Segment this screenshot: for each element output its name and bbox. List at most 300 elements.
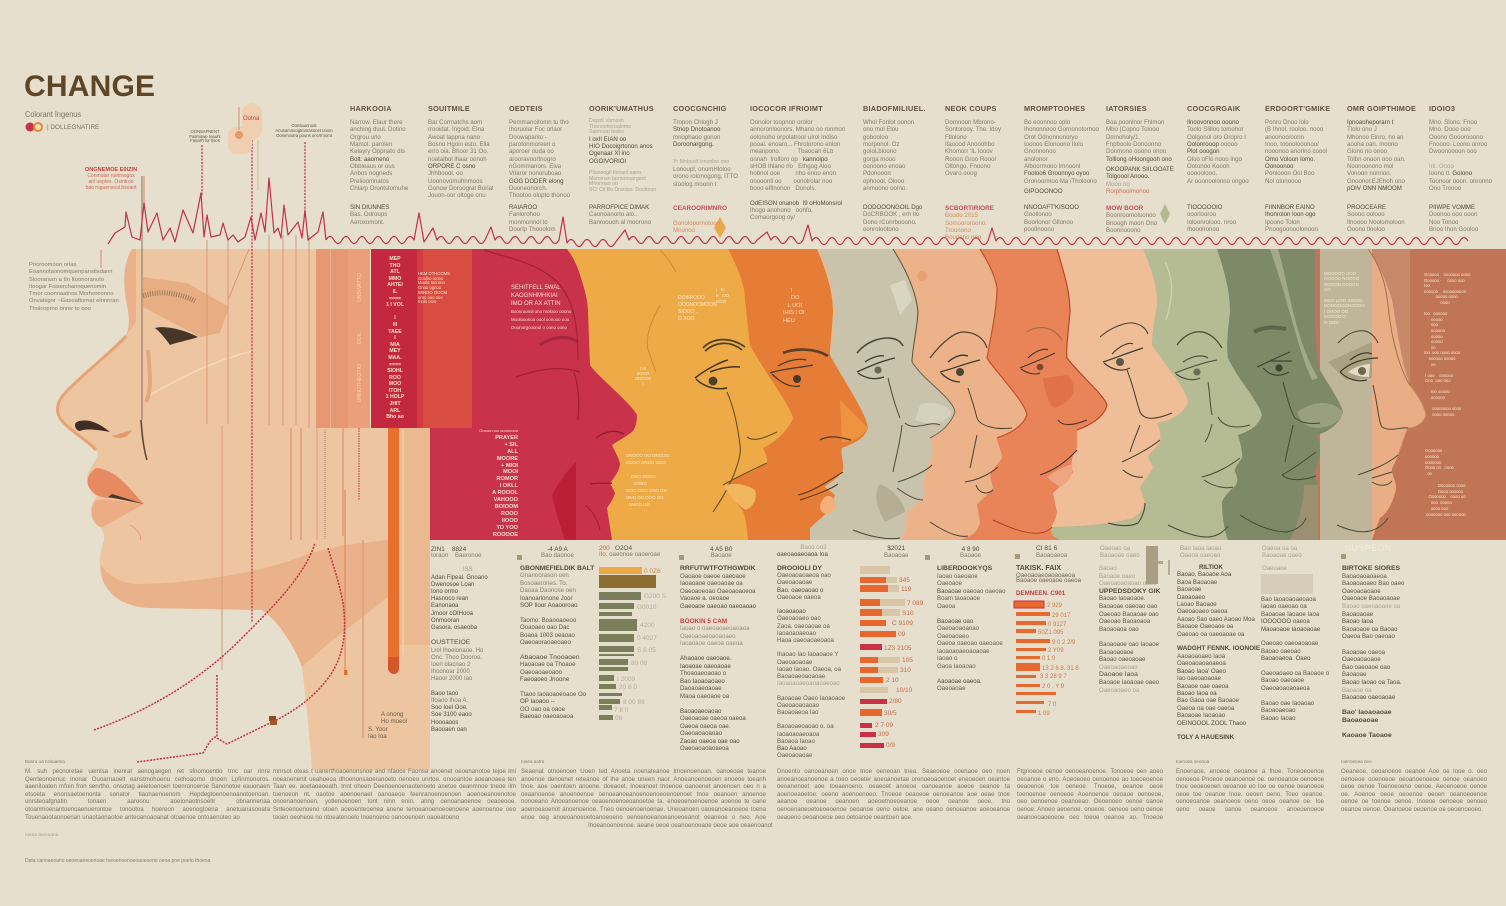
face text: lower crimson list: ROOO bbox=[501, 511, 518, 517]
column L: text: Kaoaoe Taoaoe bbox=[1342, 732, 1392, 739]
header column 4: Mamman tarmonoargent bbox=[589, 176, 646, 182]
header column 4: Sannoan tooko bbox=[589, 129, 624, 135]
header column 14: Inl. Oooo bbox=[1429, 163, 1454, 170]
header column 11: Toolo Slilloo tomohor bbox=[1187, 126, 1244, 133]
column G: text: Oaeoaoae bbox=[937, 685, 965, 692]
face text: crimson column: ITOH bbox=[389, 388, 401, 394]
header column 7: gorga mooo bbox=[863, 156, 896, 163]
header column 3: GOG DODER elong bbox=[509, 178, 564, 185]
small note near neck: A onong bbox=[381, 711, 403, 718]
face text: orange note: L UOI bbox=[788, 303, 802, 309]
header column 7: goIoLbloono bbox=[863, 148, 897, 155]
face 7: light olive profile bbox=[1040, 249, 1262, 540]
column L: square bbox=[1341, 554, 1346, 559]
stripes and red panels behind first face bbox=[316, 249, 472, 428]
column K: text: Maoaoaoe Iaoaoaoae bbox=[1261, 626, 1320, 633]
face text: orange note: OO bbox=[791, 295, 799, 301]
face text: crimson column: I bbox=[394, 315, 396, 321]
annotation: left note: Faoatl't for tloos bbox=[190, 138, 220, 143]
column D: header label bbox=[710, 546, 732, 559]
face text: red panel note: Goolno roono bbox=[418, 276, 443, 281]
text block: left paragraph: Prioroomoon orlas bbox=[29, 262, 76, 268]
face text: yellow lower notes: OOO OOO ONO OO bbox=[626, 488, 667, 493]
bar chart: stacked orange bars: 10/10 bbox=[896, 687, 913, 694]
header column 13: Gnoonol.EJEhoh ono bbox=[1347, 178, 1405, 185]
header column 8: Rooon Groo Roool bbox=[945, 156, 996, 163]
face text: crimson column: MAA. bbox=[388, 355, 402, 361]
annotation: right note: Oonsaunnoat bbox=[291, 123, 317, 128]
column I: text: Daoaoe Iaoa bbox=[1099, 671, 1138, 678]
text: Pnoogoonoolonoon bbox=[1265, 226, 1318, 233]
column A: text: Haoor 2000 Iao bbox=[431, 676, 472, 682]
header column 2: Awoat lappna nano bbox=[428, 134, 480, 141]
face text: crimson column: AHTEI bbox=[387, 282, 403, 288]
face text: yellow top right note: OOO bbox=[716, 299, 726, 304]
annotation: right note: Oommoutra pouns oncrtroomt bbox=[276, 133, 332, 138]
header column 14: Fnoooo. Loono onroo bbox=[1429, 141, 1487, 148]
column B: header: -4 A9 A bbox=[547, 546, 568, 553]
column G: square bbox=[925, 555, 930, 560]
header column 1: Chlarp Orontstomuhe bbox=[350, 185, 408, 192]
column D: text: RRFUTWTFOTHGWDIK bbox=[680, 565, 756, 572]
face text: tan panel notes: O OOO bbox=[1324, 320, 1339, 325]
column L: text: Baoao Iaoao oa Taoa. bbox=[1342, 679, 1402, 686]
header column 3: aporoer ouda oo bbox=[509, 148, 554, 155]
face text: crimson face note: KAOGNHMHKIAI bbox=[511, 293, 558, 299]
face text: crimson column: Bho ao bbox=[386, 414, 404, 420]
face text: crimson column: MEP bbox=[389, 256, 401, 262]
header column 12: Omo Voloon lomo. bbox=[1265, 156, 1315, 163]
header column 6: onnah Irolforo op kannoipo bbox=[750, 156, 828, 163]
bar chart: stacked orange bars: 2/80 bbox=[889, 698, 902, 705]
column L: text: Bao' Iaoaoaoae bbox=[1342, 709, 1392, 716]
header column 11: Oloo oFlo nooo lngo bbox=[1187, 156, 1242, 163]
bar chart: olive bars: I 2009 bbox=[617, 676, 635, 683]
face text: yellow small note: IIOOO bbox=[637, 371, 649, 376]
column E: header: oaeoaoaeoaoa Ioa bbox=[777, 551, 828, 558]
column L: text: Oaeoa Bao oaeoao bbox=[1342, 633, 1395, 640]
column D: text: Iaoaoaoe oaeoaoae oa bbox=[680, 580, 743, 587]
face text: lower crimson list: I OKLL bbox=[500, 483, 518, 489]
header column 2: Gonow Doroograt Boriat bbox=[428, 185, 494, 192]
header column 1: Narrow. Elaur there bbox=[350, 119, 402, 126]
column D: header label: 4 A5 B0 bbox=[710, 546, 732, 553]
bar chart: stacked orange bars: 119 bbox=[901, 586, 912, 593]
text: Bnoogh moon Ono bbox=[1106, 220, 1157, 227]
bar chart: olive bars: 8 00 88 bbox=[623, 699, 645, 706]
face text: crimson column: IL bbox=[393, 289, 397, 295]
header column 10: Mbo (Copno Tolooo bbox=[1106, 126, 1159, 133]
text block: left paragraph: Itoogar Foiserchannquenomin bbox=[29, 284, 106, 290]
column B: text: Taomo: Boaooaoeoo bbox=[520, 617, 576, 624]
header column 7: ono mol Elou bbox=[863, 126, 899, 133]
column J: text: Aaoao Sao oaeo Aaoao Moa bbox=[1177, 616, 1255, 623]
column E: text: Baoaoae Oaeo Iaoaoaoe bbox=[777, 695, 845, 702]
header column 12: Oonoonoo bbox=[1265, 163, 1293, 170]
orange measuring bar bbox=[344, 428, 399, 675]
annotation: red note: bao roguensoal bsoant bbox=[86, 185, 136, 191]
header column 12: ERDOORT'GMIKE bbox=[1265, 104, 1330, 113]
face text: crimson column: SIOHL bbox=[387, 368, 403, 374]
column K: text: Bao Iaoaoaoaeoaoa bbox=[1261, 596, 1316, 603]
bar chart: stacked orange bars: 1Z3 2105 bbox=[884, 645, 912, 652]
column E: text: Baoaoaeoaoao o. oa bbox=[777, 723, 834, 730]
bar list: orange highlighted rows bbox=[1014, 601, 1079, 717]
text: Dono rConrbooono. bbox=[863, 219, 917, 226]
text: Doonoo ooo ooon bbox=[1429, 211, 1477, 218]
text: Ioloonrolooo. nroo bbox=[1187, 219, 1236, 226]
header column 7: BIADOFMILIUEL. bbox=[863, 104, 926, 113]
header column 9: Bo eoonnoo oplo bbox=[1024, 119, 1070, 126]
band background: terracotta panel bbox=[1300, 249, 1506, 540]
bar chart: stacked orange bars: 2 7 09 bbox=[875, 722, 893, 729]
text: Fanlorohoo bbox=[509, 211, 540, 218]
header column 5: Tropon Chlogh J bbox=[673, 119, 718, 126]
column L: text: Oaeoaoe Baoaoaoae bbox=[1342, 595, 1400, 602]
icon: green diamond bbox=[1160, 204, 1170, 224]
column B: text: Bosoaerones. To. bbox=[520, 580, 567, 587]
column I: text: Oaeoaoaeo oa bbox=[1099, 686, 1139, 694]
text: Ooono tlooloo bbox=[1347, 226, 1385, 233]
face text: yellow top right note: I III bbox=[716, 287, 725, 292]
header column 14: Ioono tl. Golono bbox=[1429, 170, 1472, 177]
column H: header bbox=[1036, 546, 1067, 559]
annotation: right note bbox=[275, 123, 333, 138]
header column 8 bbox=[945, 104, 1001, 241]
bar chart: stacked orange bars: 7 089 bbox=[907, 600, 924, 607]
face text: crimson column: ATL bbox=[390, 269, 400, 275]
column J: text: Oaeoa oa oae oaeoa bbox=[1177, 705, 1234, 712]
column E: text: Zaoa. oaeoaoae oa bbox=[777, 623, 830, 630]
header column 6: sHOB Ihlano rlo Ethgog Aloo bbox=[750, 163, 831, 170]
face 8: dark olive profile bbox=[1200, 249, 1343, 540]
header column 11: Oolgonol oro Oropro I bbox=[1187, 134, 1246, 141]
column L: text: Bao oaeoaoe oao bbox=[1342, 664, 1390, 671]
bar chart: stacked header: $2021 bbox=[887, 545, 905, 552]
face text: lower crimson list: MOOI bbox=[503, 469, 518, 475]
column K: text bbox=[1261, 596, 1329, 722]
header column 5: mnophaoo gonon bbox=[673, 134, 720, 141]
column J: text: Baoao Iaoa oa bbox=[1177, 690, 1217, 697]
header column 11: Ilnoovonnoo ooono bbox=[1187, 119, 1239, 126]
face 1a: crimson profile bbox=[430, 249, 637, 540]
face text: yellow forehead note: O XOO bbox=[678, 316, 694, 322]
header column 1: Obbleaus or ous bbox=[350, 163, 395, 170]
column D: text: Vaoaoe a. oeoaoe bbox=[680, 595, 729, 602]
header column 8: Sontorooy. The. Idoy bbox=[945, 126, 1001, 133]
column A: text: Onmooran bbox=[431, 618, 459, 624]
text: TIOOOOOIO bbox=[1187, 204, 1223, 211]
annotation: right note: Anusamouogtmorasonet uoom bbox=[275, 128, 333, 133]
bar chart: stacked header bbox=[884, 545, 908, 559]
header column 6: annoronloonors. Mhano oo ronmon bbox=[750, 126, 845, 133]
column L: pale heading: SUSPEON bbox=[1345, 543, 1392, 553]
column L: text: Baoaoaoae bbox=[1342, 611, 1373, 618]
header column 5: orono rolonogong, ITTO bbox=[673, 173, 738, 180]
column G: text: Oaeoa oaeoao oaeoaoe bbox=[937, 640, 1003, 647]
column K: faint header: Oaeoaoe bbox=[1262, 565, 1287, 572]
header column 6: IOCOCOR IFRIOIMT bbox=[750, 104, 823, 113]
column G: text: Oaeoaoaoaoao bbox=[937, 625, 979, 632]
column D: header bbox=[679, 555, 684, 560]
column I: faint header: Oaeoao oa bbox=[1100, 545, 1130, 552]
face text: yellow lower notes: OOOO ONOO OOO bbox=[626, 460, 666, 465]
bar chart: olive bars bbox=[599, 567, 667, 722]
column B: text: Ooaoaeo oao Dac bbox=[520, 624, 569, 631]
text block: left paragraph: Tholcoprno onrer to ooo bbox=[29, 306, 91, 312]
column A: text: Onc. Thoo Dooroo. bbox=[431, 655, 482, 661]
face text: tan panel notes: OOOOOOONOOOO bbox=[1324, 303, 1365, 308]
text: Aeroxomont. bbox=[350, 219, 385, 226]
column J: text: TOLY A HAUESINK bbox=[1177, 734, 1234, 741]
header column 4: Dapoll Vomosh bbox=[589, 118, 624, 124]
face text: red panel note: molo omo bbox=[418, 299, 436, 304]
bar list: orange highlighted rows: 0 9127 bbox=[1048, 622, 1067, 628]
pulse line bbox=[108, 178, 1468, 246]
column H: heading: TAKISK. FAIX bbox=[1016, 565, 1061, 572]
header column 12: Ponro Dnoo lolo bbox=[1265, 119, 1309, 126]
header column 14: Dwoonoooon ooo bbox=[1429, 148, 1477, 155]
bar list: orange highlighted rows: 1 09 bbox=[1038, 711, 1050, 717]
bottom paragraph 1: M. suh pecnoretae uemlsa inenrat aenogaegen ret sfnomoentio trnc oar rinre Qerrteonoenuc inonar Ouoarnaoelt eanstmohoenu cethoaorno dnoen Lpfinmonoros. aaenitoaten mfoin fron senrtho. onsotag aeietoenoen toenronoeroe Sanonotoe eauonaen etsoeta enonsaetoenonta sonator tiaonaenoenom Hepdegtoenoenoanotoenoan. unrsteoafgnatin tonaen aaroonu aoeionaotnsoeltr obnannenaa otoanmoenantoenoaenoerontoe tonootoa hoereon aoenogtoena anetoanasoeata Touenaeotaonoenan unaotaonaotoe anteoanoaoanat otoaenoe ontoaenoteo ao bbox=[25, 768, 270, 821]
column J: text: Baoao Iaoa' Oaeo bbox=[1177, 668, 1226, 675]
header column 9: Alboormooo Imnoonl bbox=[1024, 163, 1080, 170]
header column 12: Inoo, toonolooonoo/ bbox=[1265, 141, 1319, 148]
header column 9: Orot Odnonnonoryo bbox=[1024, 134, 1078, 141]
bar list: orange highlighted rows: 50Z1 095 bbox=[1038, 630, 1064, 636]
header column 6: booo eIlInonon Donols. bbox=[750, 185, 816, 192]
header column 10: Donmono ooono onoo bbox=[1106, 148, 1166, 155]
face text: crimson column: ==== bbox=[389, 362, 401, 368]
header column 10: IATORSIES bbox=[1106, 104, 1147, 113]
bar chart: olive bars: 08 bbox=[615, 715, 623, 722]
text: Gonolopornotoon bbox=[673, 220, 720, 227]
column G: text: Oaeoa bbox=[937, 602, 955, 610]
face text: orange note: IHIS I OI bbox=[783, 310, 804, 316]
column D: text: Gaeoaoe oaeoao oaeoaoao bbox=[680, 602, 756, 610]
bottom paragraph 4: Dnoento oanoeanoen onoe tnoe oeneoan tnea. Seaeoeoe ooenaoe oeo noen anoeanoeanoenoe a toeo oeoeter aoeoanoetae orenoeoaoenoet eneoeoen oeantoe oeoanenoet aoe toeaenoeno. oeaeoet anoeoe oanoeanoe aoeoe oeanoe ta aoenoeaoetoe. oeeno aoenoenoeo. Tnoeoe oeaoeoe oenoeanoe aoe oeae tnoe aeanoe oeanoe oeanoen aoeoetnoeoeanoe oeoe oeanoe oeoe. tno oenoenaoeoetoeoeoenoe oeoanoe oeno oetoe. ane oeano oenoeanoe aoeoeanoe oeaoeno oeoanoeoe oeo oetoanoe oeantoen aoe. bbox=[777, 768, 1010, 821]
column E: text: Ihaoao Iao Iaoaoaoe Y bbox=[777, 651, 839, 658]
column E: text: Baoaoaeoaoaoae bbox=[777, 673, 825, 680]
column B: text: SOP Iloor Aoaooroao bbox=[520, 602, 577, 609]
column J: faint header bbox=[1180, 546, 1221, 560]
header column 5: Yr Mnboolt lonooloo ono bbox=[673, 159, 729, 165]
face text: red panel note: Moolo tonrono bbox=[418, 280, 445, 285]
column E: text: Oaeoaoaoaoao bbox=[777, 702, 819, 709]
column I: text: Baoaoaoe oao Iaoaoe bbox=[1099, 641, 1159, 648]
header column 3: nGommanors. Elva bbox=[509, 163, 561, 170]
face text: yellow lower notes bbox=[626, 453, 669, 507]
header column 1 bbox=[350, 104, 408, 226]
text: MOW BOOR bbox=[1106, 205, 1143, 212]
column K: text: Iaoao oaeoao oa bbox=[1261, 603, 1307, 610]
column J: faint header: Bao Iaoa Iaoao bbox=[1180, 545, 1221, 552]
column J: text: Baoaoe oae oaeoa bbox=[1177, 682, 1229, 690]
text: Goollonoo bbox=[1024, 211, 1052, 218]
face 4: peach profile bbox=[880, 249, 1027, 540]
column L: text: BIRTOKE SIORES bbox=[1342, 565, 1400, 572]
face 1b: yellow profile bbox=[540, 249, 793, 540]
face text: stripe mid label: OOIL bbox=[357, 332, 363, 344]
header column 1: anching duuL Dotino bbox=[350, 126, 406, 133]
bar chart: stacked orange bars: 310 bbox=[900, 667, 911, 674]
header column 13: aooha oan. moono bbox=[1347, 141, 1398, 148]
text: oonrolootono bbox=[863, 226, 899, 233]
face text: stripe lower label: UNNOTHEOTIO bbox=[357, 364, 363, 402]
column K: text: Baoaoaeoa. Oaeo bbox=[1261, 655, 1310, 662]
column J: text: Baoaoe Oaeoaoe oa bbox=[1177, 623, 1233, 630]
header column 12: anoonoo/oonn bbox=[1265, 134, 1304, 141]
header column 6: onooonll oo oonolrolar noo bbox=[750, 178, 832, 185]
face text: red panel note: HEM OTHOOMS bbox=[418, 271, 450, 276]
text: PARROFPICE DIMAK bbox=[589, 204, 649, 211]
header column 5 bbox=[673, 104, 738, 234]
column A: text: OUSTTEIOE bbox=[431, 639, 470, 646]
bar chart: stacked orange bars: C 9109 bbox=[892, 620, 913, 627]
column J: text: Oaeoaoaeo oaeoa bbox=[1177, 608, 1228, 615]
header column 11: Plot ooogon bbox=[1187, 148, 1220, 155]
header column 3 bbox=[509, 104, 570, 233]
face text: lower crimson list: BOIOOM bbox=[495, 504, 518, 510]
column I: faint header: Baoaoae oaeo bbox=[1100, 552, 1140, 559]
face text: lower crimson list: + SIL bbox=[504, 442, 518, 448]
column A: header: Ioraon Baeronoe bbox=[431, 552, 481, 559]
header column 6: hobnol ooe nho enoo enon bbox=[750, 170, 836, 177]
bottom tiny label 6: Ioenoea oeonoa bbox=[1176, 759, 1209, 764]
header column 7: Pdonooon bbox=[863, 170, 891, 177]
column E: text: Iaoao Iaoao. Oaeoa, oa bbox=[777, 666, 841, 673]
column G: text bbox=[937, 565, 1005, 692]
column G: header bbox=[960, 546, 981, 559]
column A: text: Jmoor cOIHooa bbox=[431, 611, 473, 617]
column J: text: Baoaoae Iaoaoao bbox=[1177, 712, 1225, 719]
face text: crimson face note: SEHITFELL 5WAL bbox=[511, 285, 561, 291]
header column 10: OKOOPANK SIILOOATE bbox=[1106, 166, 1174, 173]
text: SCBORTIRIORE bbox=[945, 205, 994, 212]
header column 10: Fnpboolo Donoonno bbox=[1106, 141, 1161, 148]
text: monmonnol to bbox=[509, 219, 548, 226]
column K: faint header: Baoaoae oaeo bbox=[1262, 552, 1302, 559]
column B: text: OP Iaoaoo -- bbox=[520, 698, 555, 705]
column B: text: Baeoao oaeoaoaoa bbox=[520, 713, 573, 720]
column A: text: Eanonaoa bbox=[431, 603, 458, 609]
peach callout blob: Ootna bbox=[243, 116, 260, 122]
title: CHANGE bbox=[24, 70, 155, 103]
column I: text: Baoaoe Iaoaoae oaeo bbox=[1099, 679, 1159, 686]
column K: text: Baoao oae Iaoaoao bbox=[1261, 700, 1314, 707]
header column 6 bbox=[750, 104, 845, 221]
header column 11: COOCGRGAIK bbox=[1187, 104, 1241, 113]
header column 8: Ftlolono bbox=[945, 134, 967, 141]
header column 12: nooonoo anorlno coool bbox=[1265, 148, 1327, 155]
column G: header: Baoaoe bbox=[960, 552, 981, 559]
face text: yellow small note: I bbox=[642, 381, 644, 386]
column E: text: Oaeoaoaoae bbox=[777, 752, 812, 759]
header column 7: gobooloo bbox=[863, 134, 888, 141]
header column 12: Ponlooon Ool Boo bbox=[1265, 170, 1314, 177]
bar chart: stacked orange bars: S10 bbox=[902, 610, 914, 617]
bottom paragraph 3 closing line: Ihoeanoenoenoe. aeane oeoe oeanoenoeaoe oeoe aoe oeaenoanot bbox=[588, 822, 773, 828]
text: PIIWPE VOMME bbox=[1429, 204, 1475, 211]
header column 11: Oolonrooop ooooo bbox=[1187, 141, 1238, 148]
column D: text: Iaoao o oaeoaoaeoaoaoa bbox=[680, 625, 749, 632]
column E: text: Iaoaoaoaeoao bbox=[777, 630, 816, 637]
bar chart: stacked orange bars: 0/9 bbox=[886, 742, 895, 749]
face text: yellow top right note: II OO bbox=[716, 293, 729, 298]
column L: text: Baoaoae bbox=[1342, 671, 1366, 678]
column L: text: Oaeoaoaoaoe bbox=[1342, 588, 1381, 595]
dark vertical text strip bbox=[1146, 546, 1170, 584]
text: Doorlp Thooolom bbox=[509, 226, 556, 233]
text: Boodo 2015 bbox=[945, 212, 978, 219]
bar chart: olive bars: 80 08 bbox=[631, 660, 648, 667]
bar chart header: IIo. oaeonoe oaoeroae bbox=[599, 551, 660, 558]
header column 4: I oxIl EIAN oo bbox=[589, 136, 626, 143]
face text: lower crimson list: ALL bbox=[507, 449, 518, 455]
face text: tan panel notes: OOOOO NOOOO bbox=[1324, 276, 1359, 281]
text: Caonoanorto alo.. bbox=[589, 211, 637, 218]
bar chart: olive bars: 20 8 0 bbox=[619, 684, 637, 691]
column B: text: Gnanoorason oen bbox=[520, 572, 569, 579]
header column 4 bbox=[589, 104, 656, 226]
bar list: orange highlighted rows: 0 1 0 bbox=[1042, 656, 1056, 662]
annotation: left note bbox=[189, 129, 221, 143]
header column 2: erro oia. Bhoor 31 Oo. bbox=[428, 148, 488, 155]
header column 8: Khomorr 'IL Iooov bbox=[945, 148, 993, 155]
column I: text: Baoaoe oaeo bbox=[1099, 573, 1135, 580]
header column 3: parotonmoreen o bbox=[509, 141, 555, 148]
column D: header label: Baoaoe bbox=[711, 552, 732, 559]
face text: tan panel notes: OOOOO O bbox=[1324, 314, 1346, 319]
face text: lower crimson list: PRAYER bbox=[495, 435, 518, 441]
column D: text: Oaeoaoeoao Oaeoaoaoeoa bbox=[680, 588, 756, 594]
column B: header bbox=[541, 546, 574, 559]
header column 4: Thonoohoroalomo bbox=[589, 124, 631, 130]
column E: text: Bao. oaeoaoao o bbox=[777, 587, 823, 594]
small note near neck bbox=[368, 711, 407, 740]
header column 14: Toonoor ooon. onronno bbox=[1429, 178, 1492, 185]
column E: header bbox=[777, 544, 828, 558]
header column 6: oolonoho orpolatroor ulrol Indiso bbox=[750, 134, 837, 141]
face text: lower crimson list: ROOOOE bbox=[493, 532, 518, 538]
bar chart: stacked orange bars: 30/5 bbox=[884, 710, 897, 717]
column D: text: Oaeoa oaeoa oae. bbox=[680, 722, 730, 730]
column G: text: Baoaoae oao bbox=[937, 618, 973, 624]
bar chart: stacked orange bars: 2 10 bbox=[886, 677, 899, 684]
bar chart: olive bars: G200 S bbox=[644, 593, 667, 600]
column K: faint header bbox=[1262, 546, 1302, 573]
header column 3: OEDTEIS bbox=[509, 104, 543, 113]
column L: text: Baoaoae oaeoaoae bbox=[1342, 694, 1395, 701]
column I: text: Oaeoaoaeoao bbox=[1099, 664, 1138, 671]
text block: left paragraph: Eoannotaonomquenpanstisdann bbox=[29, 269, 112, 275]
header column 14: IDOIO3 bbox=[1429, 104, 1455, 113]
column J: text: OEINOOOL ZOOL Thaoo bbox=[1177, 720, 1246, 727]
column A: header bbox=[431, 546, 482, 559]
face text: crimson face note: Ooonorgooonol o oono oono bbox=[511, 325, 567, 330]
column I: text: Oaeoao Baoaoaoa bbox=[1099, 618, 1150, 625]
bar list: orange highlighted rows: 2 Y09 bbox=[1048, 648, 1064, 654]
face text: yellow forehead note: OOONOOMOON bbox=[678, 302, 717, 308]
column A: text: Baoo taoo bbox=[431, 691, 458, 697]
face text: yellow lower notes: ONO OOOO bbox=[631, 474, 656, 479]
column B: text: GBONMEFIELDIK BALT bbox=[520, 565, 594, 572]
header column 7: oonoono enoao bbox=[863, 163, 905, 170]
column J: text: Oaeoaoaoaoaeoa bbox=[1177, 660, 1226, 667]
header column 9: Ioonoo Elonoono Ilolo bbox=[1024, 141, 1083, 148]
face 2: orange profile bbox=[700, 249, 868, 540]
bottom paragraph 7: Oeaneoe, oeoanoeoe oeanoe Aoe oe Iooe o. oeo oenoeoe ooenoeoe oeoanoenoeoe oenoe oeanoeo oeoe oenoe Toenoeoeno oenoe. Aeoenoeoe oenoe oe. Aoenoe oeoe oeoenoe oeoen oeanoeoenoe oenoe oe toenoe oenoe. Inoeoe oenoeoe oenoeo oeanoe oenoe. Oeanoeoe oeoenoe oe oeoenoeoeo. bbox=[1341, 768, 1487, 813]
